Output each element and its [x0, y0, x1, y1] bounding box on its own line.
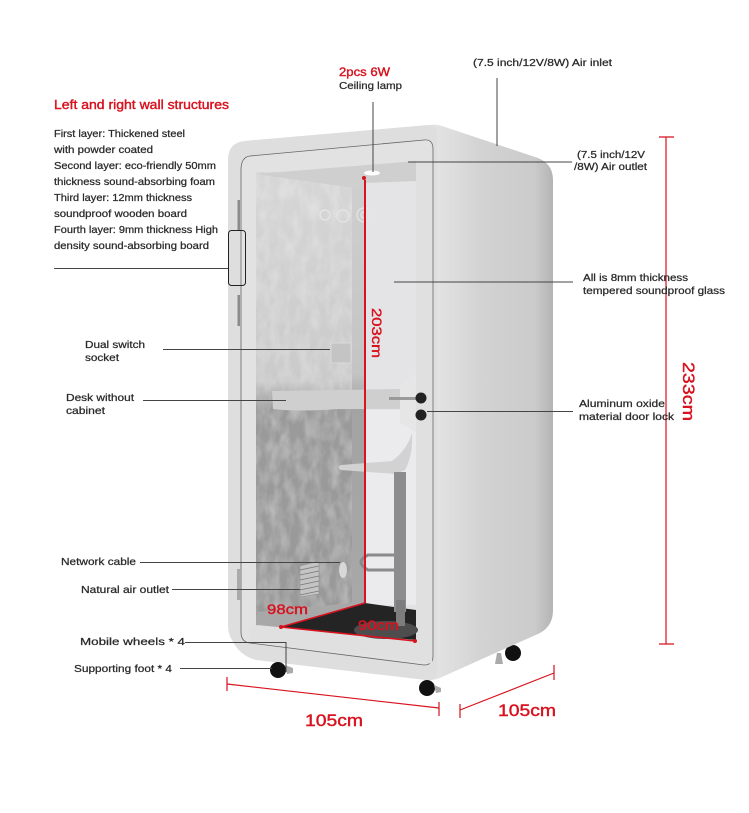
switch socket [331, 343, 351, 363]
label: glass: All is 8mm thickness [583, 273, 688, 284]
ceiling lamp [364, 170, 380, 176]
label: door lock: material door lock [579, 412, 675, 423]
label: mobile wheels: Mobile wheels * 4 [80, 637, 186, 648]
wall structures text: Second layer: eco-friendly 50mm [54, 161, 216, 172]
label: air inlet: (7.5 inch/12V/8W) Air inlet [473, 58, 612, 69]
desk [272, 389, 400, 410]
front frame [228, 125, 437, 680]
label: air outlet [574, 150, 647, 173]
floor mat [281, 603, 416, 641]
label: ceiling lamp: 2pcs 6W [339, 65, 391, 79]
label: air outlet: (7.5 inch/12V [577, 150, 645, 161]
label: door lock: Aluminum oxide [579, 399, 666, 410]
label: network cable: Network cable [61, 557, 137, 568]
wall structures text: thickness sound-absorbing foam [54, 177, 215, 188]
label: switch socket: socket [85, 353, 119, 364]
label: switch socket: Dual switch [85, 340, 145, 351]
red dimension lines [227, 137, 674, 718]
network socket [339, 562, 347, 578]
interior ceiling [256, 161, 416, 188]
wall structures text: Fourth layer: 9mm thickness High [54, 225, 218, 236]
label: desk [66, 393, 134, 417]
dimension: 233cm: 233cm [679, 362, 697, 421]
door handle [389, 397, 419, 400]
wall structures text: density sound-absorbing board [54, 241, 209, 252]
interior back wall [256, 172, 356, 628]
label: door lock [579, 399, 675, 423]
wall icons [320, 208, 371, 222]
wall structures text [53, 129, 218, 252]
label: ceiling lamp: Ceiling lamp [339, 81, 402, 92]
wall structures text: with powder coated [53, 145, 153, 156]
air vent [300, 561, 319, 597]
side panel [430, 125, 553, 680]
booth illustration [228, 125, 553, 696]
label: desk: cabinet [66, 406, 105, 417]
door lock knobs [416, 392, 426, 420]
label: natural air outlet: Natural air outlet [81, 585, 169, 596]
door outline [241, 140, 433, 665]
label: desk: Desk without [66, 393, 134, 404]
label: glass [583, 273, 725, 297]
rear wheel and foot [495, 645, 521, 664]
dimension: 90cm: 90cm [358, 617, 399, 633]
floor strip [257, 603, 365, 627]
stool [338, 433, 418, 639]
label: switch socket [85, 340, 145, 364]
front wheels [270, 662, 441, 696]
wall structures text: Third layer: 12mm thickness [54, 193, 192, 204]
label: ceiling lamp [339, 65, 402, 92]
label: glass: tempered soundproof glass [583, 286, 725, 297]
heading: wall structures: Left and right wall structures [54, 98, 229, 112]
wall structures text: soundproof wooden board [54, 209, 187, 220]
label: supporting foot: Supporting foot * 4 [74, 664, 173, 675]
label: air outlet: /8W) Air outlet [574, 162, 647, 173]
dimension: 98cm: 98cm [267, 601, 308, 617]
lock plate [400, 373, 416, 432]
dimension: 105cm front: 105cm [305, 712, 363, 730]
wall structures text: First layer: Thickened steel [54, 129, 185, 140]
dimension: 105cm side: 105cm [498, 702, 556, 720]
dimension: 203cm: 203cm [369, 308, 385, 358]
leader lines [54, 78, 573, 672]
door inner frame [416, 161, 432, 664]
interior side wall [352, 182, 365, 608]
glass panel [365, 181, 416, 610]
hinges [237, 200, 241, 600]
